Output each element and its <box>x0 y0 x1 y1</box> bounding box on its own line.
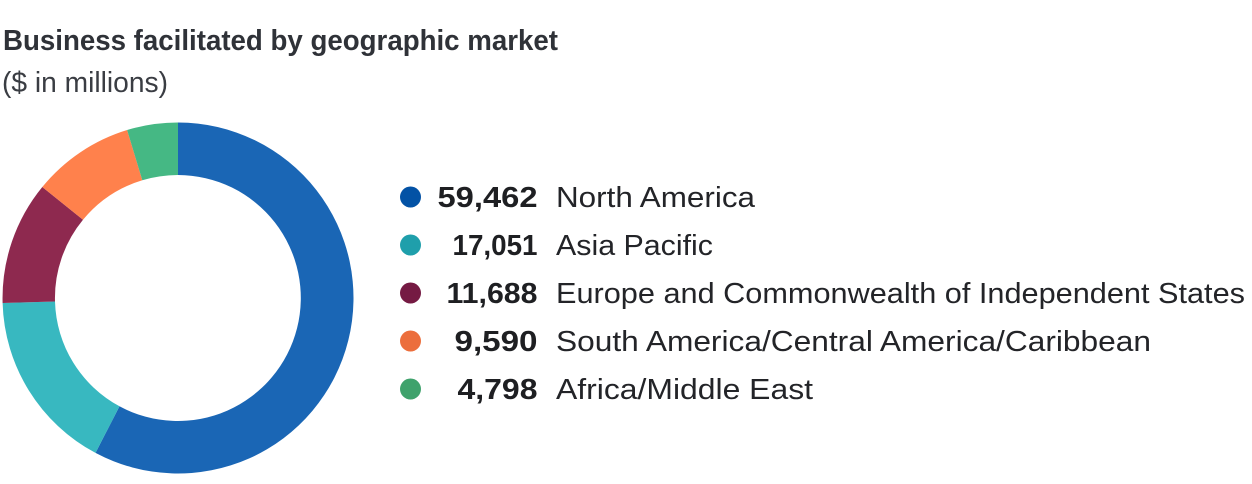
subtitle: ($ in millions) <box>2 67 168 99</box>
legend row: Asia Pacific: Asia Pacific <box>556 230 713 262</box>
legend row: North America: North America <box>556 182 755 214</box>
legend row: South America/Central America/Caribbean: South America/Central America/Caribbean <box>556 326 1151 358</box>
segment: Africa/Middle East <box>127 122 178 180</box>
legend row: North America <box>400 182 755 214</box>
legend <box>400 182 1245 406</box>
legend row: South America/Central America/Caribbean: 9,590 <box>454 326 538 358</box>
legend row: Africa/Middle East: Africa/Middle East <box>556 374 813 406</box>
segment: South America/Central America/Caribbean <box>42 130 142 220</box>
legend row: North America: 59,462 <box>438 182 538 214</box>
legend row: Asia Pacific: 17,051 <box>452 230 538 262</box>
segment: Europe and Commonwealth of Independent States <box>3 187 83 303</box>
donut chart <box>3 122 353 474</box>
legend row: Africa/Middle East: 4,798 <box>458 374 538 406</box>
segment: Asia Pacific <box>3 302 120 453</box>
legend row: Asia Pacific <box>400 230 713 262</box>
segment: North America <box>96 122 353 474</box>
title: Business facilitated by geographic market <box>3 25 558 57</box>
legend row: Africa/Middle East <box>400 374 813 406</box>
legend row: Europe and Commonwealth of Independent States: 11,688 <box>446 278 538 310</box>
legend row: Europe and Commonwealth of Independent States: Europe and Commonwealth of Independent States <box>556 278 1245 310</box>
